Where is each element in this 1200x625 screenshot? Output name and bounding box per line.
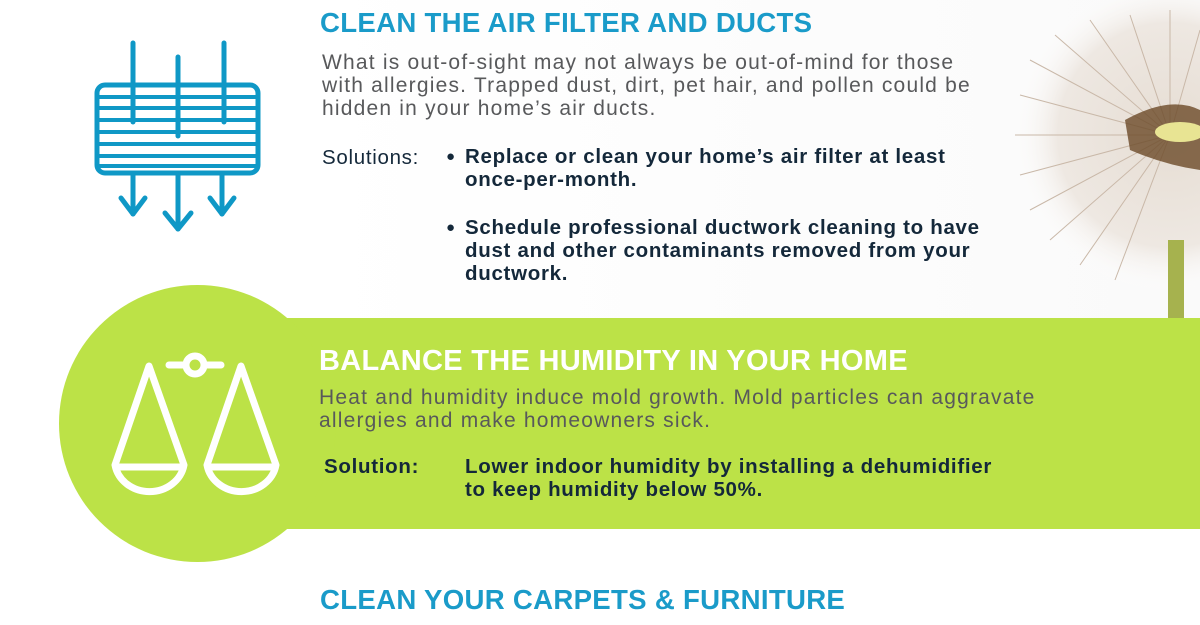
bullet list: filter solutions: ductwork.	[465, 262, 568, 285]
text: humidity intro: allergies and make homeowners sick.	[319, 409, 711, 432]
bullet list: filter solutions	[446, 145, 980, 285]
text: air filter intro: with allergies. Trapped dust, dirt, pet hair, and pollen could be	[322, 74, 971, 97]
bullet list: filter solutions: ●	[446, 148, 456, 165]
text: air filter intro: hidden in your home’s air ducts.	[322, 97, 657, 120]
heading: carpets: CLEAN YOUR CARPETS & FURNITURE	[320, 584, 845, 615]
label: solutions: Solutions:	[322, 146, 419, 169]
text: humidity intro: Heat and humidity induce mold growth. Mold particles can aggravate	[319, 386, 1036, 409]
icon: air filter	[94, 40, 260, 232]
heading: humidity: BALANCE THE HUMIDITY IN YOUR HOME	[319, 345, 908, 377]
icon: scale	[112, 352, 280, 496]
text: humidity solution	[465, 455, 992, 501]
text: humidity solution: Lower indoor humidity by installing a dehumidifier	[465, 455, 992, 478]
text: humidity intro	[319, 386, 1036, 432]
label: solution: Solution:	[324, 455, 419, 478]
bullet list: filter solutions: once-per-month.	[465, 168, 637, 191]
bullet list: filter solutions: Replace or clean your home’s air filter at least	[465, 145, 946, 168]
panel: humidity band	[59, 285, 1200, 562]
text: air filter intro	[322, 51, 971, 120]
bullet list: filter solutions: ●	[446, 219, 456, 236]
dandelion image	[1015, 5, 1200, 318]
text: humidity solution: to keep humidity below 50%.	[465, 478, 763, 501]
heading: air filter: CLEAN THE AIR FILTER AND DUCTS	[320, 7, 812, 38]
bullet list: filter solutions: Schedule professional ductwork cleaning to have	[465, 216, 980, 239]
bullet list: filter solutions: dust and other contaminants removed from your	[465, 239, 970, 262]
text: air filter intro: What is out-of-sight may not always be out-of-mind for those	[322, 51, 954, 74]
background photo tint	[310, 0, 1200, 318]
